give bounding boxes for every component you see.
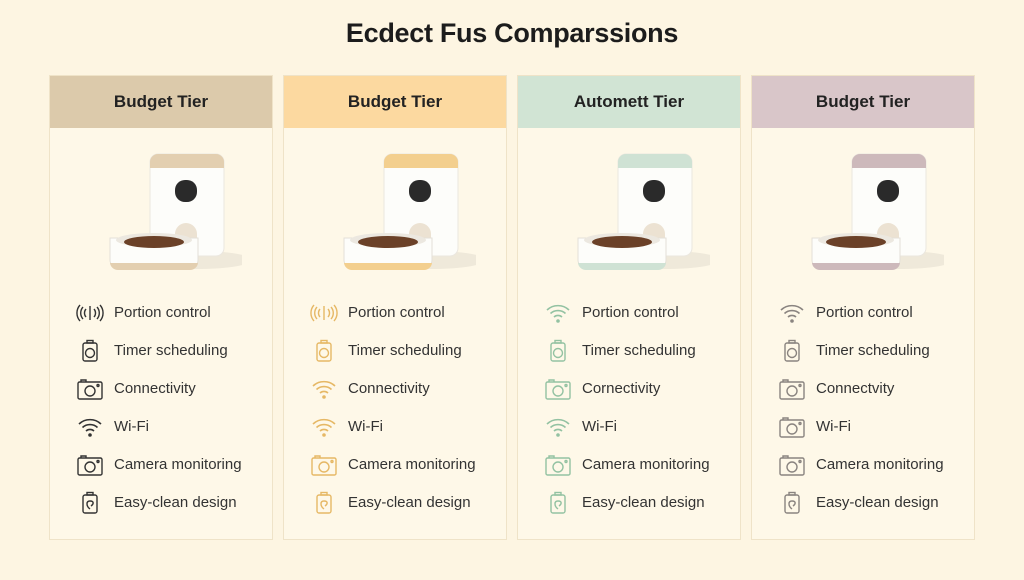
feature: wifi: Wi-Fi <box>114 418 149 435</box>
heading <box>518 76 740 128</box>
feature: camera <box>779 455 944 476</box>
feature: wifi: Wi-Fi <box>816 418 851 435</box>
feature: camera <box>311 455 476 476</box>
feature: camera: Camera monitoring <box>582 456 710 473</box>
image: feeder <box>812 154 944 270</box>
feature: camera: Camera monitoring <box>816 456 944 473</box>
image: feeder <box>344 154 476 270</box>
feature: timer: Timer scheduling <box>816 342 930 359</box>
feature: connectivity: Connectvity <box>816 380 894 397</box>
feature: wifi: Wi-Fi <box>582 418 617 435</box>
feature: portion <box>310 304 445 322</box>
feature: wifi <box>78 418 149 437</box>
feature: clean <box>316 492 471 514</box>
feature: timer <box>784 340 930 362</box>
feature: camera: Camera monitoring <box>114 456 242 473</box>
heading: Budget Tier <box>114 92 208 111</box>
feature: connectivity <box>77 379 196 400</box>
feature: clean <box>550 492 705 514</box>
image: feeder <box>578 154 710 270</box>
feature list <box>779 304 944 514</box>
feature: camera <box>545 455 710 476</box>
feature: connectivity <box>545 379 660 400</box>
feature: connectivity: Cornectivity <box>582 380 660 397</box>
heading: Budget Tier <box>348 92 442 111</box>
heading: Automett Tier <box>574 92 684 111</box>
feature: clean: Easy-clean design <box>582 494 705 511</box>
title: Ecdect Fus Comparssions <box>346 18 678 48</box>
panel: budget tier 1 <box>49 75 273 540</box>
feature: timer <box>82 340 228 362</box>
feature: camera: Camera monitoring <box>348 456 476 473</box>
panel: budget tier 4 <box>751 75 975 540</box>
feature: portion: Portion control <box>582 304 679 321</box>
feature: portion <box>546 304 679 323</box>
feature: connectivity: Connectivity <box>114 380 196 397</box>
feature: wifi <box>546 418 617 437</box>
panel: automett tier <box>517 75 741 540</box>
feature list <box>545 304 710 514</box>
feature: connectivity: Connectivity <box>348 380 430 397</box>
feature: portion <box>76 304 211 322</box>
feature: clean <box>784 492 939 514</box>
feature: wifi <box>779 417 851 438</box>
feature: portion: Portion control <box>114 304 211 321</box>
feature: timer <box>550 340 696 362</box>
feature: portion <box>780 304 913 323</box>
feature: connectivity <box>312 380 430 399</box>
feature: connectivity <box>779 379 894 400</box>
feature: camera <box>77 455 242 476</box>
feature: wifi <box>312 418 383 437</box>
heading <box>752 76 974 128</box>
feature: timer <box>316 340 462 362</box>
feature: clean: Easy-clean design <box>114 494 237 511</box>
heading <box>50 76 272 128</box>
panel: budget tier 2 <box>283 75 507 540</box>
feature: timer: Timer scheduling <box>582 342 696 359</box>
heading <box>284 76 506 128</box>
feature: clean <box>82 492 237 514</box>
feature: wifi: Wi-Fi <box>348 418 383 435</box>
feature: portion: Portion control <box>816 304 913 321</box>
feature list <box>76 304 242 514</box>
feature: clean: Easy-clean design <box>816 494 939 511</box>
feature list <box>310 304 476 514</box>
feature: clean: Easy-clean design <box>348 494 471 511</box>
image: feeder <box>110 154 242 270</box>
feature: timer: Timer scheduling <box>348 342 462 359</box>
heading: Budget Tier <box>816 92 910 111</box>
feature: timer: Timer scheduling <box>114 342 228 359</box>
feature: portion: Portion control <box>348 304 445 321</box>
